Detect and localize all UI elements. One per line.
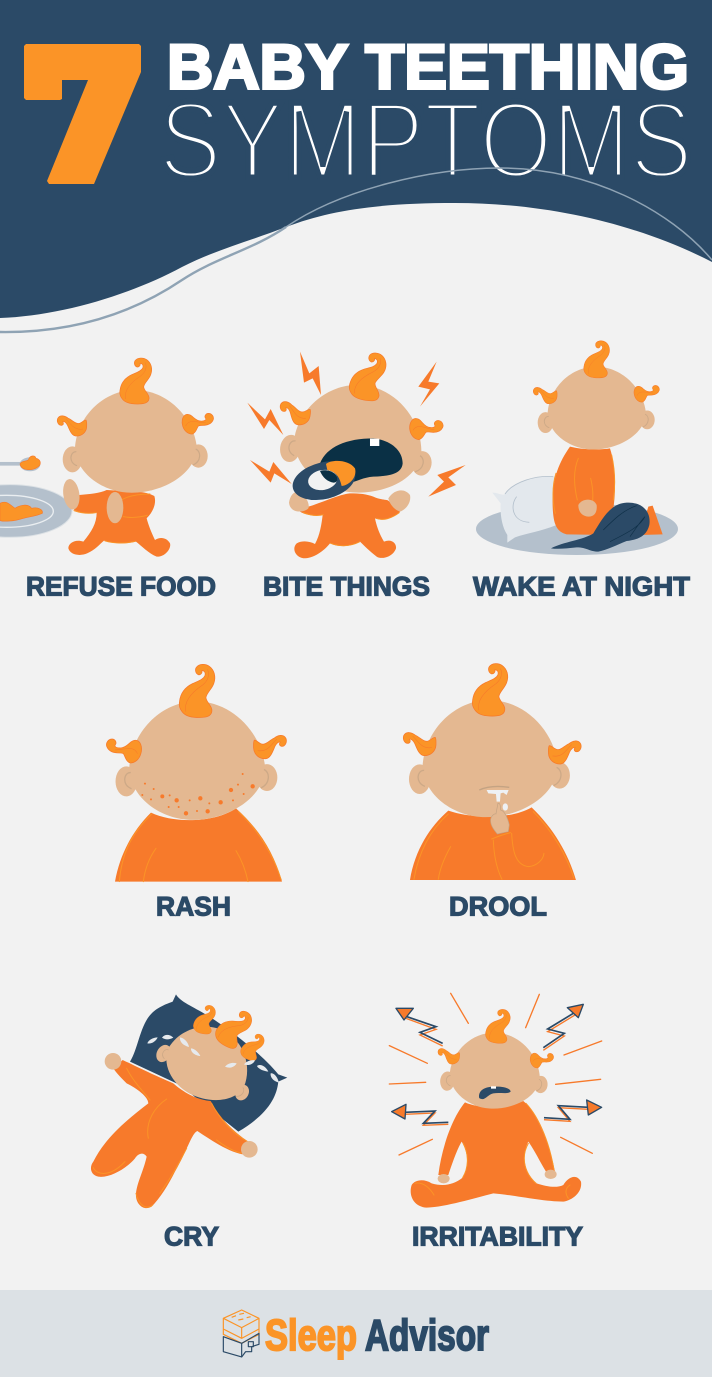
title line one: BABY TEETHING bbox=[167, 32, 689, 102]
wordmark: Sleep: Sleep bbox=[265, 1311, 357, 1360]
icon: mattress stack bbox=[223, 1310, 259, 1357]
mouth and drool bbox=[479, 787, 509, 790]
symptom: wake at night bbox=[473, 341, 690, 602]
icon: baby drooling bbox=[403, 664, 581, 880]
icon: baby sitting up on bed bbox=[476, 341, 678, 555]
tears bbox=[147, 1035, 279, 1082]
icon: baby refusing food bbox=[0, 358, 213, 557]
teether ring bbox=[289, 455, 359, 506]
label: IRRITABILITY bbox=[412, 1222, 583, 1252]
header banner wave bbox=[0, 0, 712, 318]
symptom: drool bbox=[403, 664, 581, 922]
label: WAKE AT NIGHT bbox=[473, 572, 690, 602]
label: CRY bbox=[164, 1222, 219, 1252]
label: DROOL bbox=[449, 892, 547, 922]
finger bbox=[491, 803, 509, 834]
footer bar bbox=[0, 1290, 712, 1377]
label: RASH bbox=[156, 892, 231, 922]
symptom: cry bbox=[91, 994, 287, 1252]
label: REFUSE FOOD bbox=[26, 572, 216, 602]
wordmark: Advisor: Advisor bbox=[365, 1311, 489, 1360]
mouth bbox=[479, 1086, 511, 1099]
symptom: bite things bbox=[247, 341, 466, 602]
symptom: irritability bbox=[389, 993, 602, 1252]
title bbox=[159, 32, 692, 201]
label: BITE THINGS bbox=[263, 572, 430, 602]
arrows bbox=[392, 1004, 602, 1125]
symptom: refuse food bbox=[0, 358, 216, 602]
icon: baby crying on pillow bbox=[91, 994, 287, 1208]
logo: Sleep Advisor bbox=[223, 1310, 489, 1360]
icon: baby with chin rash bbox=[106, 664, 286, 882]
mouth bbox=[320, 438, 403, 483]
swoosh line bbox=[0, 168, 712, 332]
big number 7 bbox=[24, 44, 141, 184]
icon: baby biting a teether bbox=[247, 341, 466, 558]
title line two: SYMPTOMS bbox=[159, 79, 692, 201]
rash dots bbox=[141, 773, 255, 815]
icon: irritable baby bbox=[389, 993, 602, 1208]
rays bbox=[389, 993, 602, 1155]
symptom: rash bbox=[106, 664, 286, 922]
